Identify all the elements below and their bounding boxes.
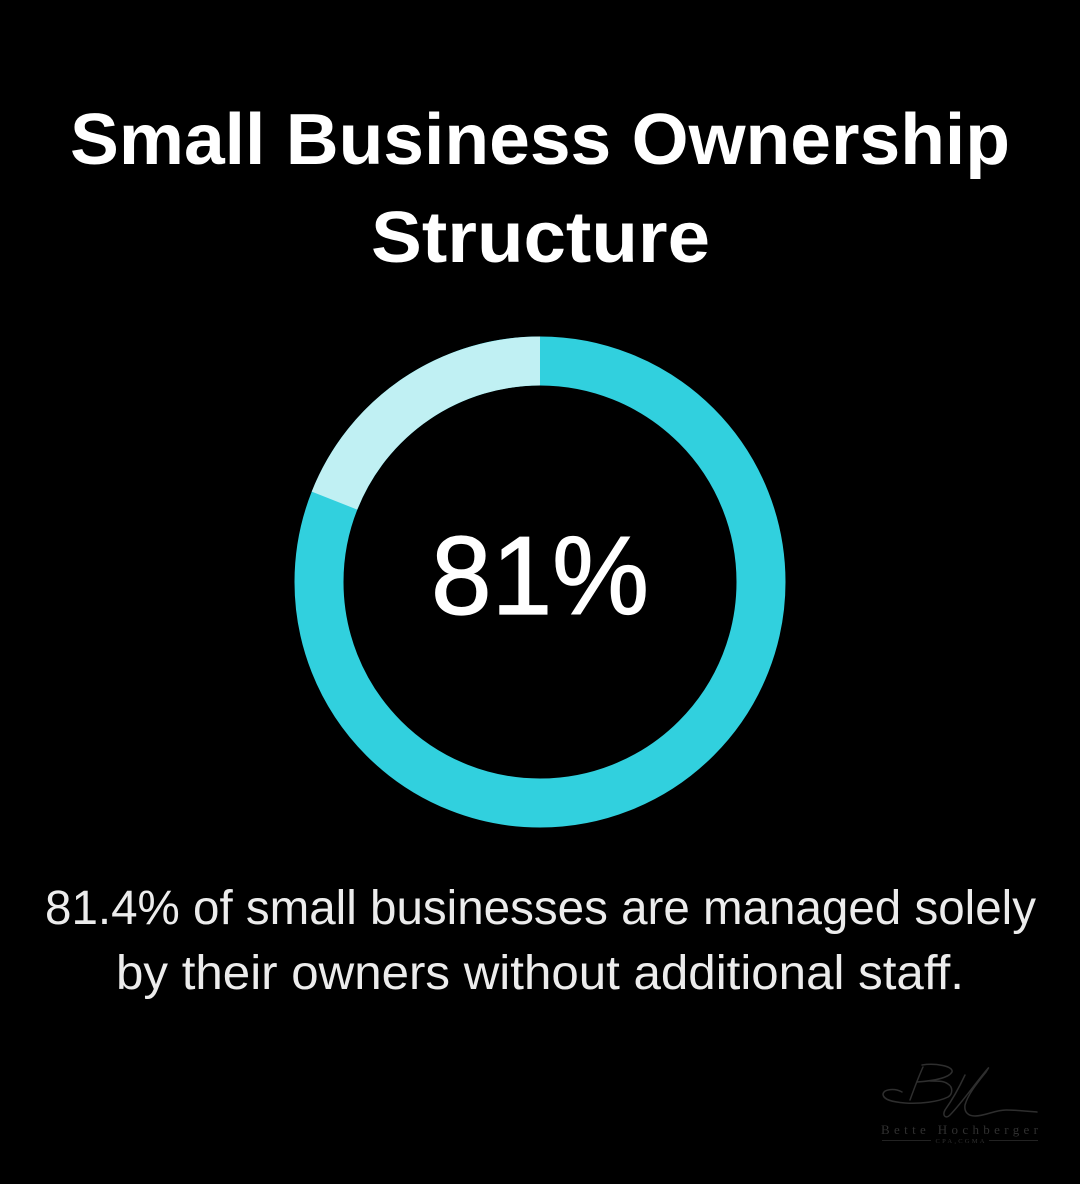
logo subtitle: CPA,CGMA xyxy=(936,1138,985,1145)
center value: 81% xyxy=(431,514,649,638)
logo: Bette Hochberger xyxy=(883,1064,1037,1117)
description: by their owners without additional staff. xyxy=(116,947,964,1000)
donut chart: 81% xyxy=(319,361,761,803)
title: Structure xyxy=(371,198,710,278)
title xyxy=(70,100,1010,278)
description: 81.4% of small businesses are managed solely xyxy=(45,882,1036,935)
description xyxy=(45,882,1036,1000)
title: Small Business Ownership xyxy=(70,100,1010,180)
logo name: Bette Hochberger xyxy=(881,1122,1039,1137)
